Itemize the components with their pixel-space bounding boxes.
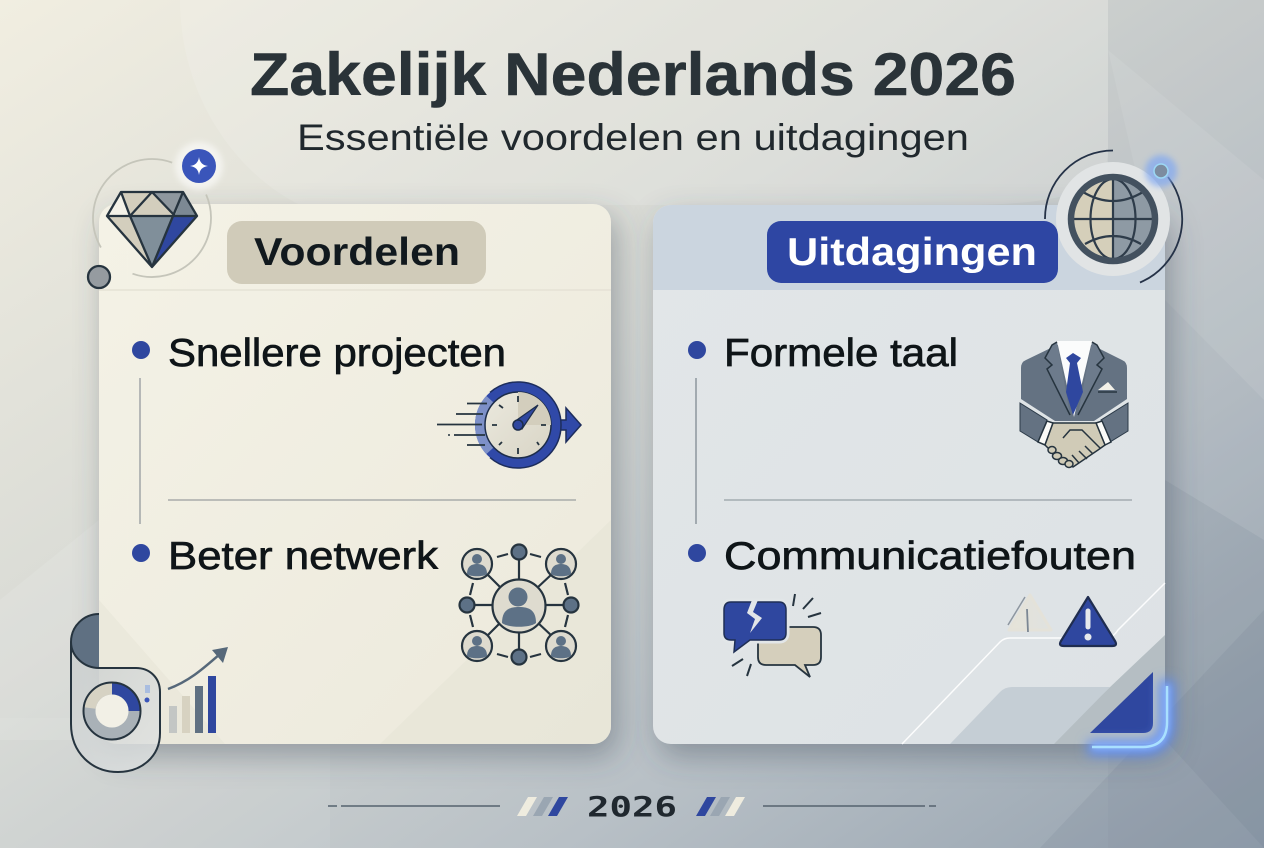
heading: Uitdagingen: Uitdagingen — [787, 231, 1037, 274]
icon: broken speech bubbles — [724, 594, 821, 677]
item: Snellere projecten: Snellere projecten — [168, 332, 506, 375]
item: Formele taal: Formele taal — [724, 332, 958, 375]
icon: globe badge — [1045, 150, 1182, 282]
icon: stopwatch with speed lines — [437, 382, 581, 468]
glow: corner bracket — [1088, 680, 1167, 748]
divider — [168, 499, 576, 501]
panel: Voordelen — [99, 204, 611, 744]
panel: Uitdagingen — [653, 205, 1165, 744]
divider — [724, 499, 1132, 501]
icon: scroll with donut chart — [71, 614, 160, 772]
timeline rule — [139, 378, 141, 524]
footer — [328, 790, 936, 823]
footer year: 2026 — [587, 790, 677, 823]
title: Zakelijk Nederlands 2026 — [250, 41, 1016, 108]
item: Communicatiefouten: Communicatiefouten — [724, 535, 1136, 578]
icon: faded warning triangle — [1008, 595, 1051, 632]
heading: Voordelen — [227, 221, 486, 284]
icon: bar chart with arrow — [168, 647, 228, 733]
subtitle: Essentiële voordelen en uitdagingen — [297, 117, 969, 158]
heading: Uitdagingen — [767, 221, 1058, 283]
timeline rule — [695, 378, 697, 524]
icon: warning triangle — [1060, 597, 1116, 646]
icon: network — [460, 544, 578, 664]
footer stripes left — [517, 797, 568, 816]
icon: diamond badge — [88, 142, 223, 288]
item: Beter netwerk: Beter netwerk — [168, 535, 439, 578]
heading: Voordelen: Voordelen — [254, 231, 460, 274]
footer stripes right — [696, 797, 745, 816]
corner accent — [1090, 672, 1153, 733]
icon: suit and handshake — [1020, 341, 1128, 468]
